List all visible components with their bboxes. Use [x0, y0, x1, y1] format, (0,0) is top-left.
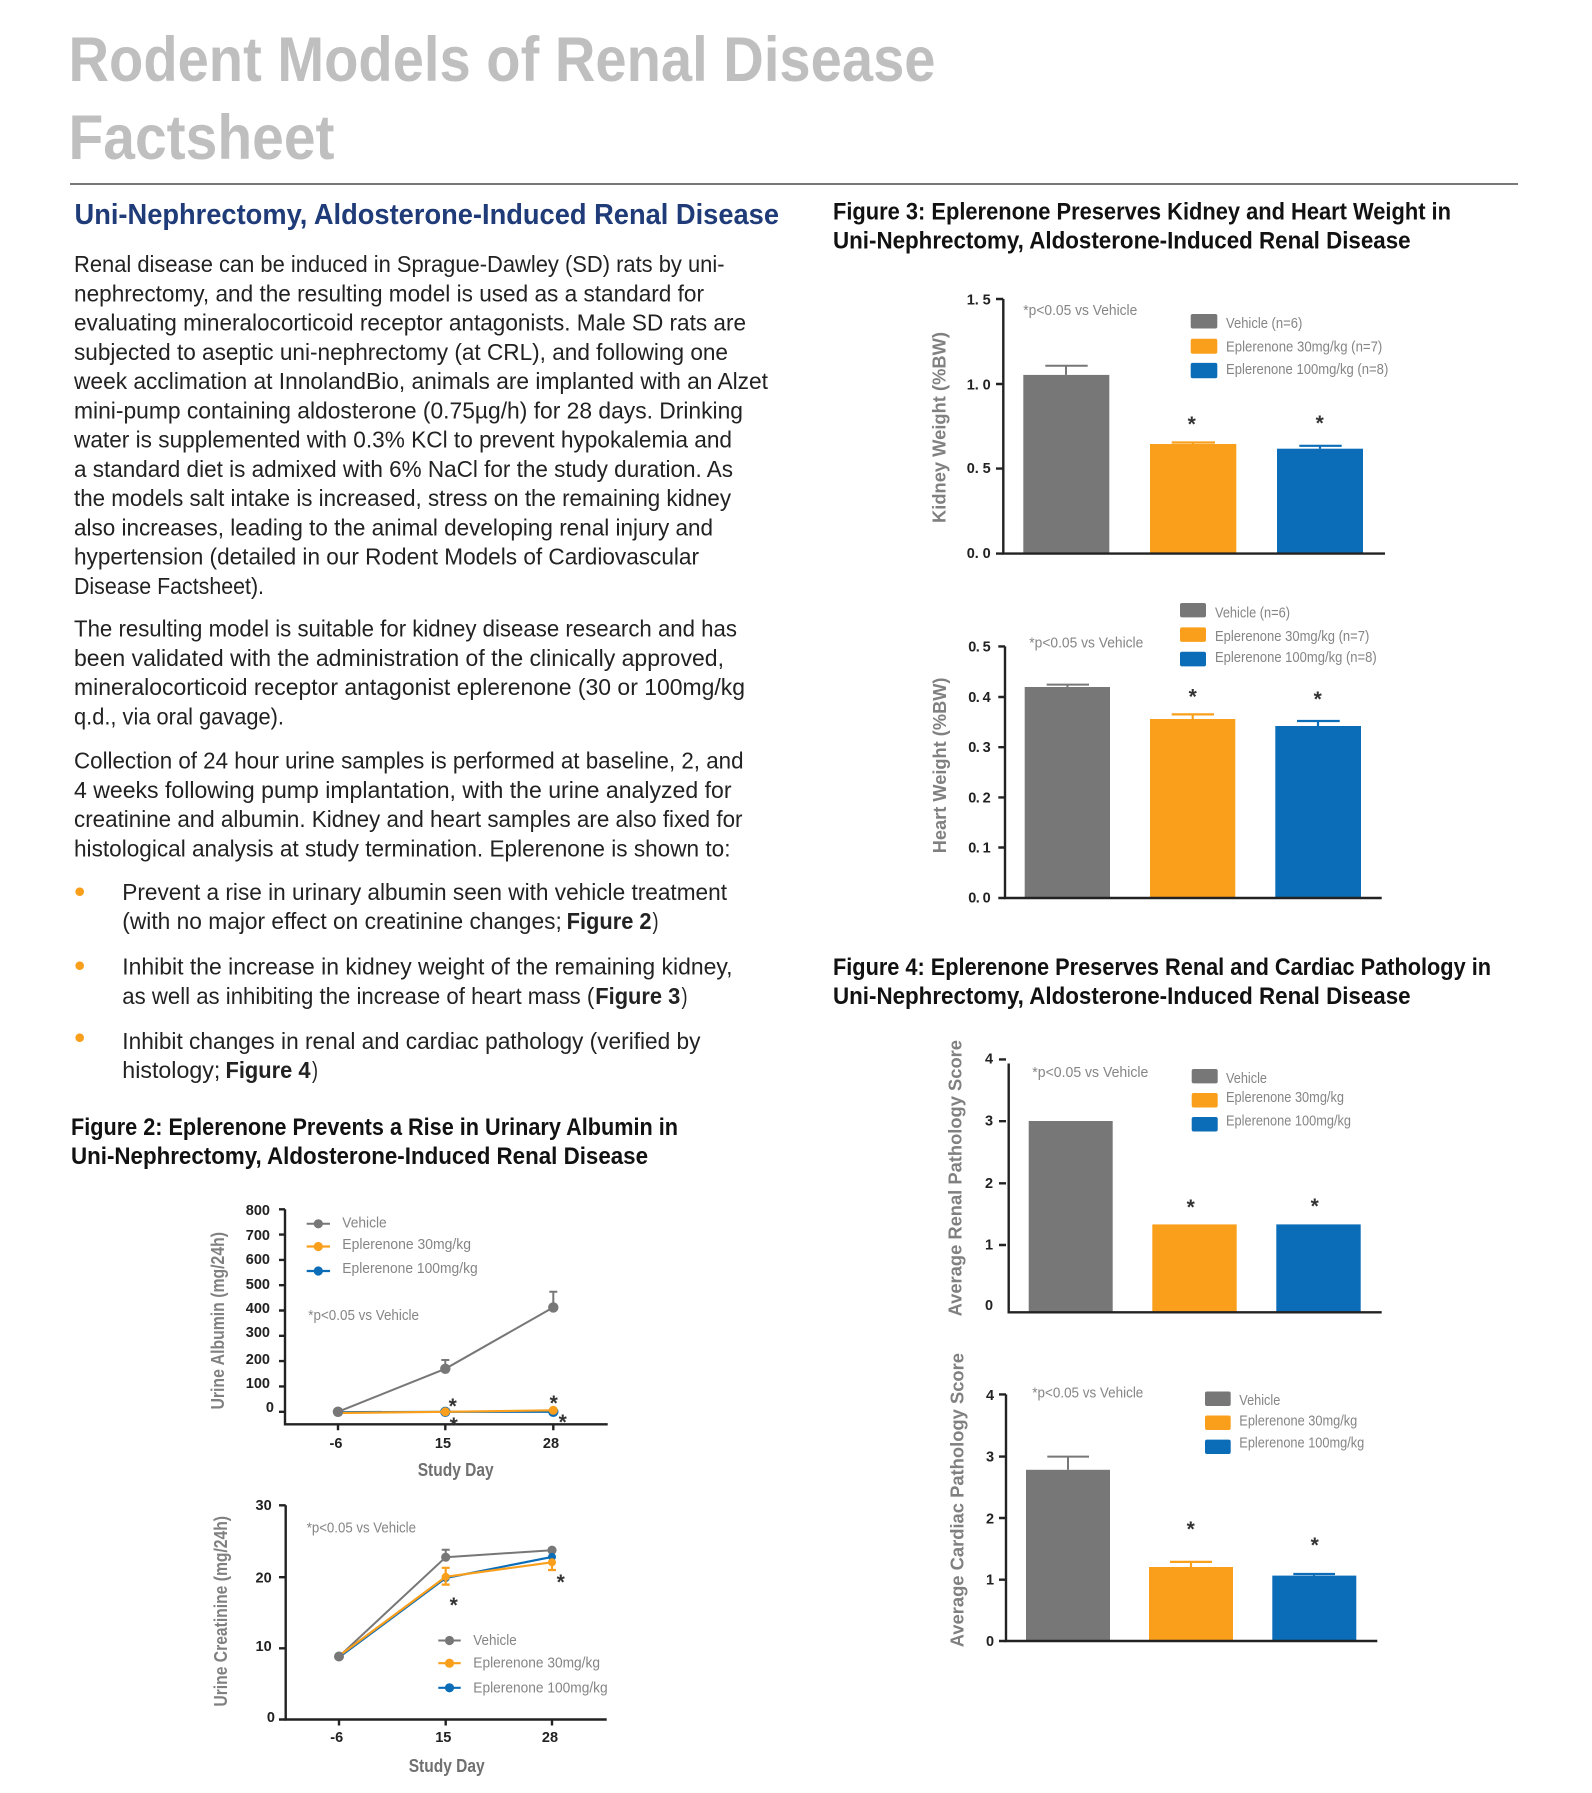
text block: paragraph 3: [74, 748, 744, 862]
legend: renal pathology: Eplerenone 100mg/kg: [1226, 1113, 1351, 1129]
line chart: urine creatinine: 30: [256, 1498, 272, 1514]
line chart: urine albumin: *: [450, 1414, 459, 1437]
bar chart: heart weight: *: [1189, 686, 1198, 708]
line chart: urine albumin: *p<0.05 vs Vehicle: [308, 1308, 419, 1324]
bar chart: cardiac pathology: *: [1311, 1534, 1320, 1557]
bar chart: renal pathology: 1: [985, 1237, 993, 1253]
legend: cardiac pathology: [1205, 1392, 1364, 1454]
bullet list: Figure 3: [595, 983, 680, 1009]
text block: paragraph 1: mini-pump containing aldosterone (0.75µg/h) for 28 days. Drinking: [74, 398, 743, 424]
bullet list: ): [682, 983, 688, 1009]
bullet list: (with no major effect on creatinine changes;: [122, 908, 562, 934]
section heading: Uni-Nephrectomy, Aldosterone-Induced Renal Disease: [74, 199, 779, 231]
text block: paragraph 1: [73, 251, 768, 599]
text block: paragraph 1: subjected to aseptic uni-nephrectomy (at CRL), and following one: [74, 339, 728, 365]
bar chart: cardiac pathology: 1: [986, 1573, 994, 1589]
line chart: urine albumin: 0: [266, 1400, 274, 1416]
text block: paragraph 3: Collection of 24 hour urine samples is performed at baseline, 2, and: [74, 748, 744, 774]
line chart: urine albumin: 600: [246, 1252, 270, 1268]
legend: cardiac pathology: Eplerenone 30mg/kg: [1239, 1414, 1357, 1430]
bar chart: renal pathology: *: [1311, 1195, 1320, 1218]
bar chart: cardiac pathology: [947, 1353, 1377, 1650]
bullet list: as well as inhibiting the increase of heart mass (: [122, 983, 594, 1009]
legend: cardiac pathology: Eplerenone 100mg/kg: [1239, 1435, 1364, 1451]
series: vehicle creatinine: [339, 1546, 557, 1656]
panel: model description: [73, 199, 779, 1083]
series: eplerenone 30 creatinine: [334, 1558, 556, 1662]
line chart: urine albumin: *: [449, 1395, 458, 1418]
text block: paragraph 1: evaluating mineralocorticoid receptor antagonists. Male SD rats are: [74, 310, 746, 336]
bullet list: ): [652, 908, 658, 934]
bullet list: Inhibit changes in renal and cardiac pathology (verified by: [122, 1028, 701, 1054]
text block: paragraph 2: mineralocorticoid receptor antagonist eplerenone (30 or 100mg/kg: [74, 674, 745, 700]
bullet list: histology;: [122, 1057, 220, 1083]
legend: creatinine: Eplerenone 100mg/kg: [473, 1680, 608, 1696]
title: Rodent Models of Renal Disease: [68, 25, 936, 95]
legend: heart weight: Eplerenone 30mg/kg (n=7): [1215, 629, 1369, 645]
series: eplerenone 30 albumin: [333, 1406, 558, 1417]
figure 4 heading: Uni-Nephrectomy, Aldosterone-Induced Renal Disease: [833, 983, 1411, 1010]
line chart: urine creatinine: *: [557, 1571, 566, 1594]
title: [68, 25, 936, 173]
text block: paragraph 1: Disease Factsheet).: [74, 573, 264, 599]
line chart: urine creatinine: 0: [267, 1710, 275, 1726]
legend: heart weight: Eplerenone 100mg/kg (n=8): [1215, 650, 1377, 666]
line chart: urine creatinine: 28: [542, 1730, 558, 1746]
bar chart: kidney weight: Kidney Weight (%BW): [930, 332, 950, 523]
legend: albumin: Eplerenone 100mg/kg: [342, 1261, 478, 1277]
series: eplerenone 100 creatinine: [339, 1553, 556, 1657]
bar chart: cardiac pathology: 4: [986, 1388, 994, 1404]
text block: paragraph 3: creatinine and albumin. Kidney and heart samples are also fixed for: [74, 806, 743, 832]
bar chart: renal pathology: 4: [985, 1052, 993, 1068]
line chart: urine creatinine: Urine Creatinine (mg/24h): [211, 1516, 231, 1707]
bar chart: cardiac pathology: 0: [986, 1634, 994, 1650]
bar chart: cardiac pathology: *p<0.05 vs Vehicle: [1032, 1385, 1143, 1401]
bullet list: Inhibit the increase in kidney weight of the remaining kidney,: [122, 953, 733, 979]
line chart: urine albumin: -6: [330, 1436, 342, 1452]
bar chart: kidney weight: [930, 292, 1388, 562]
series: vehicle albumin: [333, 1292, 558, 1417]
bar chart: kidney weight: 0. 0: [967, 546, 991, 562]
line chart: urine albumin: 300: [246, 1325, 270, 1341]
line chart: urine creatinine: *p<0.05 vs Vehicle: [307, 1521, 416, 1537]
text block: paragraph 1: water is supplemented with 0.3% KCl to prevent hypokalemia and: [73, 426, 732, 452]
line chart: urine creatinine: 10: [256, 1639, 272, 1655]
text block: paragraph 1: week acclimation at InnolandBio, animals are implanted with an Alzet: [73, 368, 768, 394]
bar chart: kidney weight: *: [1316, 412, 1325, 435]
text block: paragraph 2: been validated with the administration of the clinically approved,: [74, 645, 724, 671]
bullet list: Prevent a rise in urinary albumin seen with vehicle treatment: [122, 879, 727, 905]
text block: paragraph 3: 4 weeks following pump implantation, with the urine analyzed for: [74, 777, 732, 803]
bar chart: heart weight: 0. 3: [968, 740, 991, 756]
text block: paragraph 1: the models salt intake is increased, stress on the remaining kidney: [74, 485, 731, 511]
panel: figure 3: [833, 198, 1451, 906]
legend: renal pathology: [1192, 1069, 1351, 1132]
bar chart: cardiac pathology: Average Cardiac Pathology Score: [947, 1353, 967, 1647]
line chart: urine creatinine: -6: [330, 1730, 343, 1746]
bar chart: renal pathology: 3: [985, 1114, 993, 1130]
bar chart: kidney weight: *p<0.05 vs Vehicle: [1023, 303, 1137, 319]
line chart: urine albumin: 500: [246, 1277, 270, 1293]
text block: paragraph 2: [74, 616, 745, 730]
legend: renal pathology: Eplerenone 30mg/kg: [1226, 1090, 1344, 1106]
bar chart: kidney weight: *: [1188, 413, 1197, 436]
text block: paragraph 1: hypertension (detailed in our Rodent Models of Cardiovascular: [74, 544, 699, 570]
figure 3 heading: Figure 3: Eplerenone Preserves Kidney and Heart Weight in: [833, 198, 1451, 225]
line chart: urine creatinine: Study Day: [409, 1756, 485, 1776]
text block: paragraph 1: nephrectomy, and the resulting model is used as a standard for: [74, 280, 704, 306]
bar chart: heart weight: 0. 5: [968, 639, 991, 655]
legend: albumin: Vehicle: [342, 1216, 387, 1232]
bar chart: heart weight: 0. 2: [968, 790, 991, 806]
figure 2 heading: Figure 2: Eplerenone Prevents a Rise in Urinary Albumin in: [71, 1114, 678, 1141]
bar chart: heart weight: 0. 4: [968, 690, 991, 706]
figure 4 heading: [833, 954, 1491, 1010]
bar chart: renal pathology: [946, 1040, 1382, 1316]
text block: paragraph 1: a standard diet is admixed with 6% NaCl for the study duration. As: [74, 456, 733, 482]
legend: albumin: [307, 1216, 478, 1277]
bar chart: heart weight: [930, 603, 1382, 906]
bar chart: kidney weight: 1. 5: [967, 292, 991, 308]
line chart: urine albumin: 400: [246, 1301, 270, 1317]
line chart: urine creatinine: *: [450, 1594, 459, 1617]
text block: paragraph 3: histological analysis at study termination. Eplerenone is shown to:: [74, 836, 730, 862]
figure 2 heading: [71, 1114, 678, 1170]
bar chart: renal pathology: Average Renal Pathology Score: [946, 1040, 966, 1316]
bar chart: kidney weight: 0. 5: [967, 461, 991, 477]
legend: cardiac pathology: Vehicle: [1239, 1393, 1280, 1409]
legend: creatinine: [438, 1633, 608, 1696]
line chart: urine creatinine: 20: [256, 1571, 272, 1587]
legend: albumin: Eplerenone 30mg/kg: [342, 1237, 471, 1253]
text block: paragraph 1: also increases, leading to the animal developing renal injury and: [74, 514, 713, 540]
bar chart: heart weight: 0. 0: [968, 890, 991, 906]
legend: creatinine: Vehicle: [473, 1633, 517, 1649]
legend: kidney weight: Vehicle (n=6): [1226, 316, 1302, 332]
line chart: urine creatinine: [211, 1498, 608, 1776]
legend: creatinine: Eplerenone 30mg/kg: [473, 1656, 600, 1672]
legend: kidney weight: Eplerenone 100mg/kg (n=8): [1226, 362, 1388, 378]
title: Factsheet: [68, 103, 335, 173]
line chart: urine albumin: 28: [543, 1436, 559, 1452]
bar chart: heart weight: Heart Weight (%BW): [930, 677, 950, 853]
panel: figure 4: [833, 954, 1491, 1650]
bar chart: cardiac pathology: 3: [986, 1450, 994, 1466]
line chart: urine albumin: *: [550, 1392, 559, 1415]
legend: heart weight: [1180, 603, 1377, 666]
text block: paragraph 2: q.d., via oral gavage).: [74, 704, 284, 730]
line chart: urine albumin: 800: [246, 1203, 270, 1219]
bullet list: Figure 4: [226, 1057, 310, 1083]
bullet list: Figure 2: [567, 908, 652, 934]
bar chart: heart weight: *: [1314, 688, 1323, 711]
bar chart: heart weight: *p<0.05 vs Vehicle: [1029, 635, 1143, 651]
text block: paragraph 2: The resulting model is suitable for kidney disease research and has: [74, 616, 737, 642]
bullet list: ): [312, 1057, 318, 1083]
line chart: urine albumin: Study Day: [418, 1460, 494, 1480]
legend: renal pathology: Vehicle: [1226, 1071, 1267, 1087]
bar chart: renal pathology: 2: [985, 1176, 993, 1192]
figure 4 heading: Figure 4: Eplerenone Preserves Renal and Cardiac Pathology in: [833, 954, 1491, 981]
line chart: urine albumin: 700: [246, 1228, 270, 1244]
line chart: urine albumin: *: [559, 1411, 568, 1434]
line chart: urine creatinine: 15: [435, 1730, 451, 1746]
legend: kidney weight: [1191, 314, 1388, 378]
legend: heart weight: Vehicle (n=6): [1215, 605, 1290, 621]
line chart: urine albumin: 100: [246, 1376, 270, 1392]
bar chart: renal pathology: 0: [985, 1298, 993, 1314]
line chart: urine albumin: 200: [246, 1352, 270, 1368]
bar chart: renal pathology: *p<0.05 vs Vehicle: [1032, 1065, 1148, 1081]
legend: kidney weight: Eplerenone 30mg/kg (n=7): [1226, 339, 1382, 355]
line chart: urine albumin: 15: [435, 1436, 451, 1452]
bar chart: renal pathology: *: [1187, 1196, 1196, 1219]
bullet list: [75, 879, 732, 1083]
figure 3 heading: [833, 198, 1451, 254]
figure 2 heading: Uni-Nephrectomy, Aldosterone-Induced Renal Disease: [71, 1143, 648, 1170]
bar chart: kidney weight: 1. 0: [967, 377, 991, 393]
line chart: urine albumin: [208, 1203, 608, 1480]
bar chart: heart weight: 0. 1: [968, 840, 991, 856]
panel: figure 2: [71, 1114, 678, 1776]
series: eplerenone 100 albumin: [338, 1407, 558, 1417]
text block: paragraph 1: Renal disease can be induced in Sprague-Dawley (SD) rats by uni-: [74, 251, 724, 277]
figure 3 heading: Uni-Nephrectomy, Aldosterone-Induced Renal Disease: [833, 227, 1411, 254]
bar chart: cardiac pathology: *: [1187, 1518, 1196, 1541]
bar chart: cardiac pathology: 2: [986, 1512, 994, 1528]
line chart: urine albumin: Urine Albumin (mg/24h): [208, 1232, 228, 1410]
